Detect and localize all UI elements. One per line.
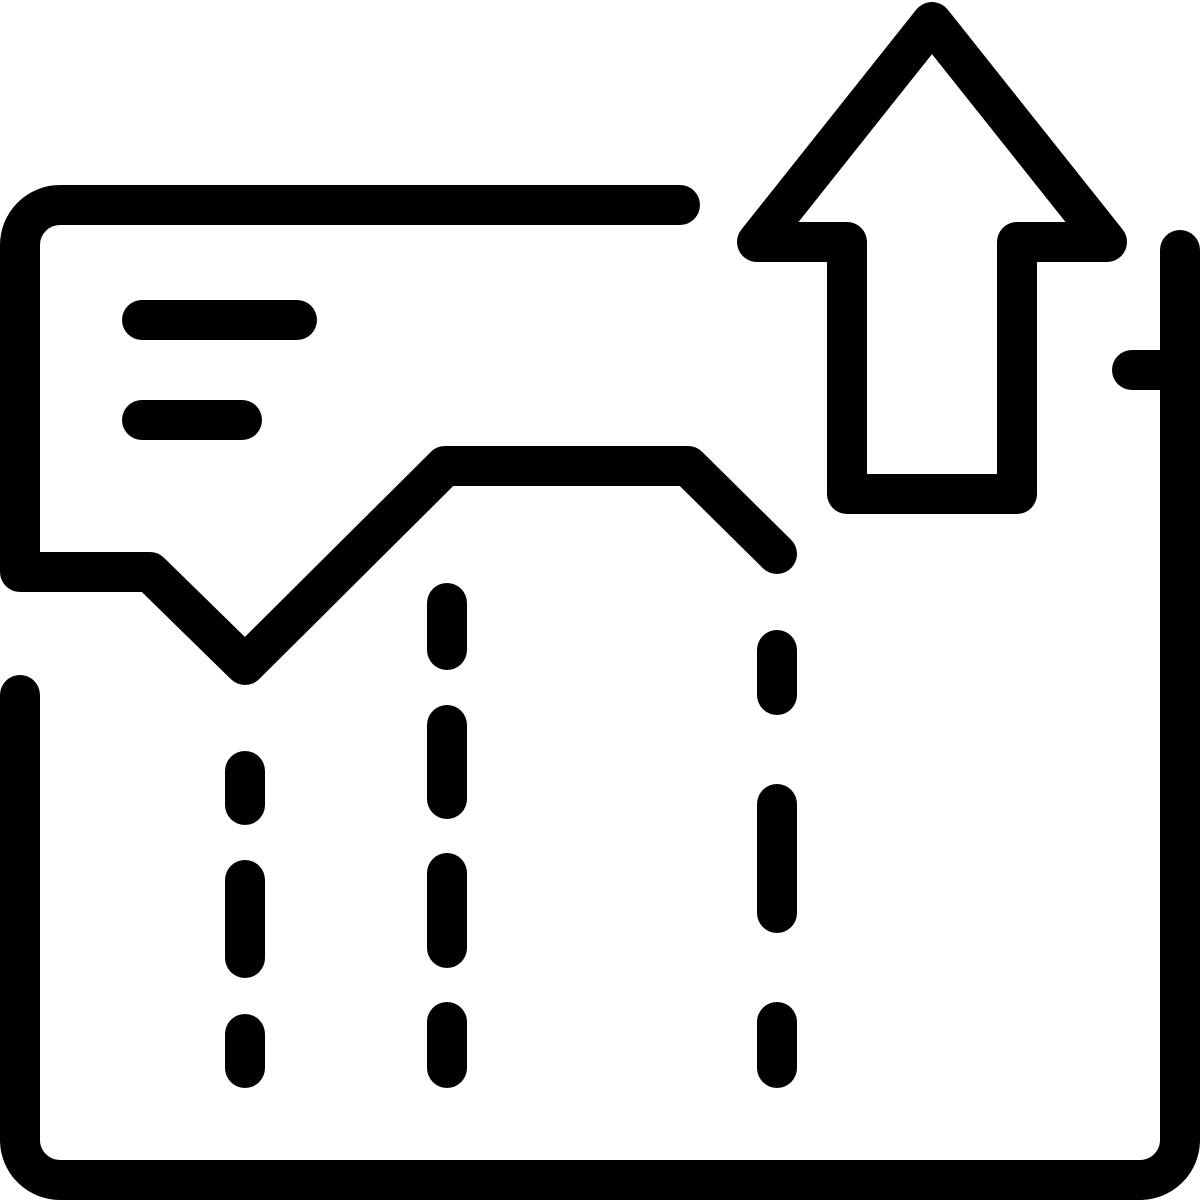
dashed line 1	[225, 771, 265, 1068]
text line 2	[142, 400, 242, 440]
frame: right and bottom border	[20, 250, 1180, 1180]
icon: up arrow	[757, 22, 1107, 494]
dashed line 3	[757, 650, 797, 1068]
speech panel with chart line	[20, 205, 777, 665]
dashed line 2	[427, 603, 467, 1068]
frame tick	[1132, 350, 1180, 390]
text line 1	[142, 300, 297, 340]
